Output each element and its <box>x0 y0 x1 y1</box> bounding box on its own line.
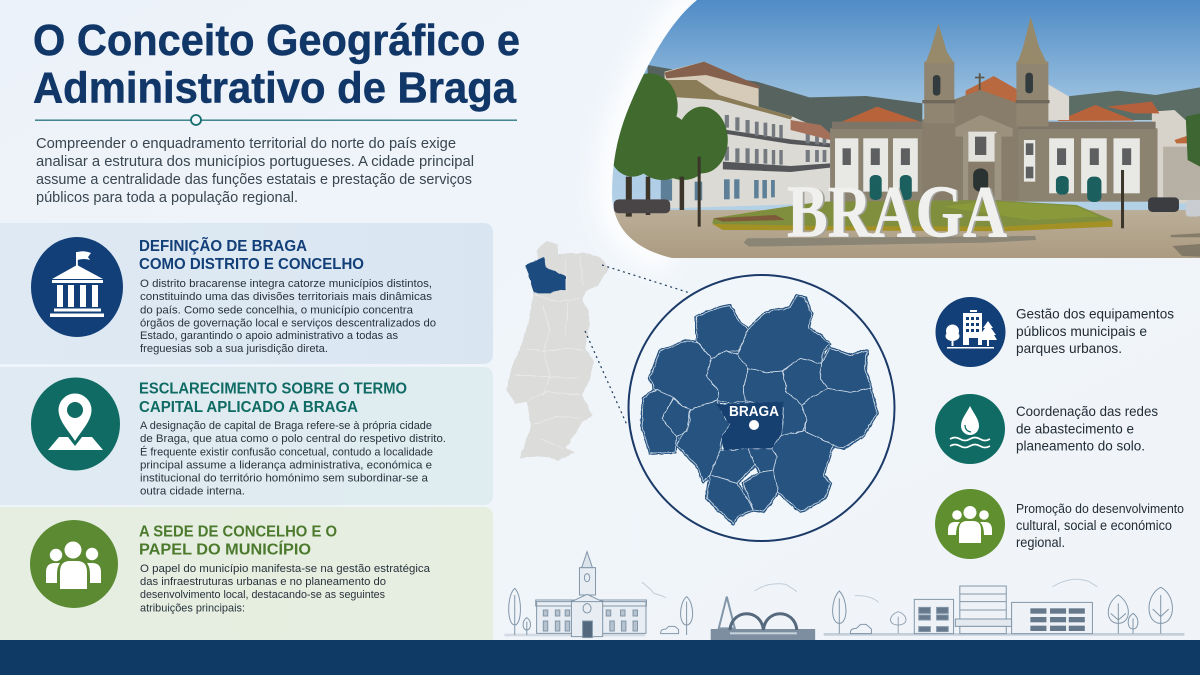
title: O Conceito Geográfico e <box>33 16 520 65</box>
intro text: assume a centralidade das funções estatais e prestação de serviços <box>36 172 472 188</box>
bridge <box>719 597 735 628</box>
map of Portugal with Braga district highlighted <box>507 242 608 460</box>
body text <box>140 563 431 614</box>
photo: Braga square and church <box>608 0 1200 267</box>
body text: de Braga, que atua como o polo central do respetivo distrito. <box>140 433 446 445</box>
modern buildings <box>914 599 954 634</box>
trees right <box>1108 595 1128 634</box>
plinth <box>744 236 1036 247</box>
towers <box>924 62 954 123</box>
body text: freguesias sob a sua jurisdição direta. <box>140 343 328 355</box>
body text: desenvolvimento local, destacando-se as seguintes <box>140 589 385 601</box>
icon: government building <box>31 237 123 337</box>
dotted connector lines <box>585 265 690 425</box>
body text: O distrito bracarense integra catorze municípios distintos, <box>140 278 432 290</box>
text: de abastecimento e <box>1016 420 1134 436</box>
bottom band <box>0 640 1200 675</box>
body text: principal assume a liderança administrativa, económica e <box>140 460 432 472</box>
title <box>33 16 520 112</box>
panel: a sede de concelho <box>0 507 493 640</box>
intro text: Compreender o enquadramento territorial do norte do país exige <box>36 136 456 152</box>
tree left <box>509 588 520 635</box>
intro text: analisar a estrutura dos municípios portugueses. A cidade principal <box>36 154 474 170</box>
text: parques urbanos. <box>1016 340 1122 356</box>
church centre <box>966 76 1016 102</box>
attribution: equipment and parks <box>936 297 1174 367</box>
tree and car <box>833 591 846 634</box>
marker dot <box>749 420 759 430</box>
label: BRAGA: BRAGA <box>729 404 779 420</box>
body text <box>140 420 446 498</box>
body text: A designação de capital de Braga refere-se à própria cidade <box>140 420 432 432</box>
cars <box>614 199 670 213</box>
intro text: públicos para toda a população regional. <box>36 190 298 206</box>
body text: É frequente existir confusão concetual, contudo a localidade <box>140 446 433 458</box>
text <box>1016 403 1158 454</box>
text: regional. <box>1016 534 1065 550</box>
heading: CAPITAL APLICADO A BRAGA <box>139 399 358 416</box>
body text: O papel do município manifesta-se na gestão estratégica <box>140 563 431 575</box>
title: Administrativo de Braga <box>33 64 516 112</box>
heading: DEFINIÇÃO DE BRAGA <box>139 235 307 255</box>
text: Coordenação das redes <box>1016 403 1158 419</box>
BRAGA letters sculpture: BRAGA <box>787 172 1007 254</box>
body text <box>140 278 436 355</box>
text: Promoção do desenvolvimento <box>1016 501 1184 516</box>
icon: building and trees <box>936 297 1006 367</box>
BRAGA letters sculpture: BRAGA <box>789 172 1009 254</box>
left building <box>665 62 759 107</box>
icon: water drop <box>935 394 1005 464</box>
body text: institucional do território homónimo sem subordinar-se a <box>140 472 429 484</box>
heading <box>139 380 407 416</box>
heading: A SEDE DE CONCELHO E O <box>139 524 337 540</box>
icon: location pin <box>31 378 120 470</box>
attribution: cultural development <box>935 489 1184 559</box>
heading <box>139 235 364 273</box>
panel: esclarecimento sobre o termo capital <box>0 367 493 505</box>
garden <box>712 200 1112 231</box>
text: cultural, social e económico <box>1016 518 1172 533</box>
church wings <box>830 128 1158 202</box>
side buildings <box>1152 110 1200 203</box>
body text: órgãos de governação local e serviços descentralizados do <box>140 318 436 330</box>
zoom circle with Braga district map <box>628 275 894 541</box>
heading: ESCLARECIMENTO SOBRE O TERMO <box>139 380 407 398</box>
body text: Estado, garantindo o apoio administrativo a todas as <box>140 330 398 342</box>
body text: das infraestruturas urbanas e no planeamento do <box>140 576 386 588</box>
text <box>1016 501 1184 550</box>
BRAGA letters sculpture <box>788 186 1008 238</box>
dotted vertical divider <box>912 280 914 557</box>
district municipalities <box>642 296 877 523</box>
church <box>537 602 646 633</box>
intro text <box>36 136 474 206</box>
trees <box>608 73 728 180</box>
icon: people group <box>935 489 1005 559</box>
car and tree <box>661 626 679 634</box>
text: públicos municipais e <box>1016 323 1147 339</box>
attribution: water and soil <box>935 394 1158 464</box>
body text: outra cidade interna. <box>140 486 245 498</box>
heading: PAPEL DO MUNICÍPIO <box>139 540 311 558</box>
text: Gestão dos equipamentos <box>1016 306 1174 322</box>
text: planeamento do solo. <box>1016 438 1145 454</box>
heading <box>139 524 337 558</box>
heading: COMO DISTRITO E CONCELHO <box>139 256 364 273</box>
body text: atribuições principais: <box>140 602 245 614</box>
body text: do país. Como sede concelhia, o município concentra <box>140 304 414 316</box>
birds <box>642 582 666 598</box>
pavement <box>614 210 1200 258</box>
icon: people <box>30 520 118 608</box>
skyline illustration <box>504 552 1184 640</box>
text <box>1016 306 1174 356</box>
panel: definição de Braga <box>0 223 493 364</box>
title rule with node <box>35 115 517 125</box>
body text: constituindo uma das divisões territoriais mais dinâmicas <box>140 291 432 303</box>
